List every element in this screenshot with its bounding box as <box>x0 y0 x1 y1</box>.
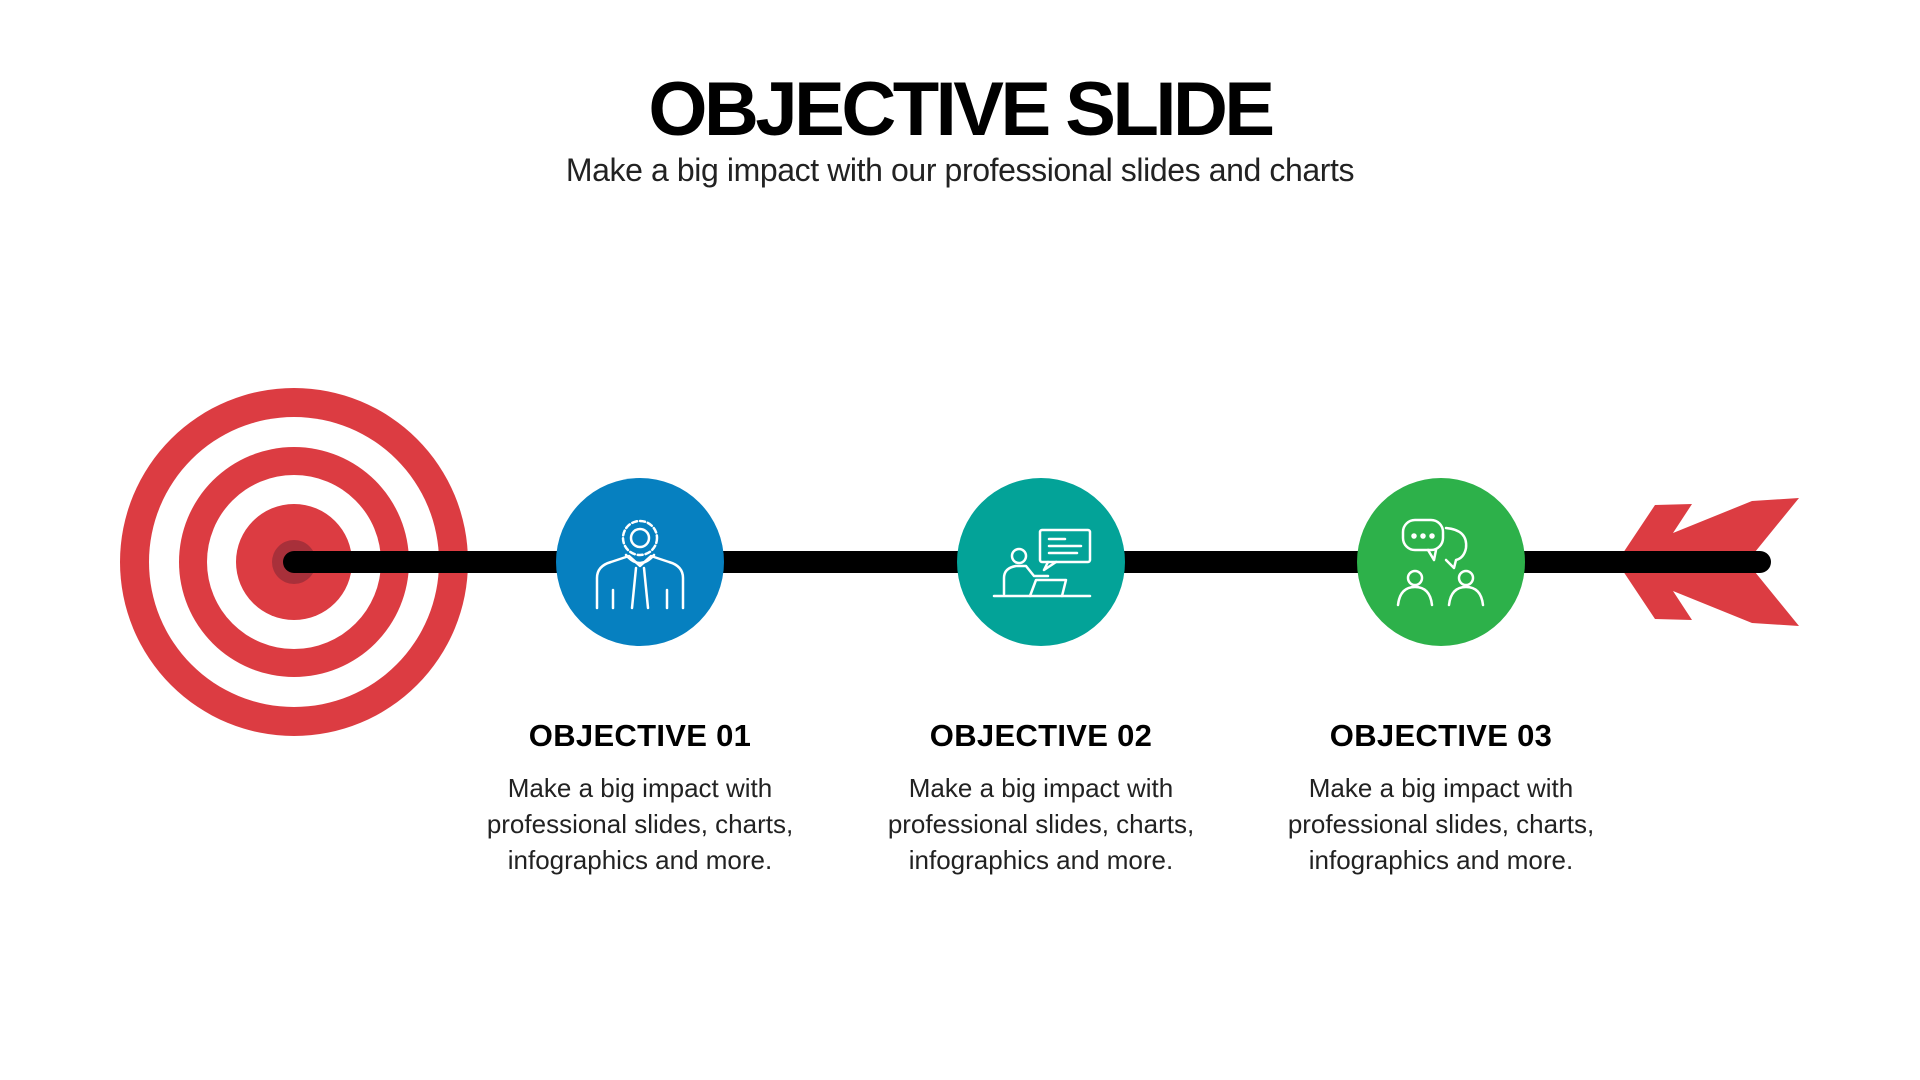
text block: objective 02 <box>888 718 1194 875</box>
arrow shaft <box>294 551 1760 573</box>
text block: objective 03: infographics and more. <box>1309 845 1573 875</box>
arrow fletching <box>1617 498 1799 626</box>
icon: chat people <box>1357 478 1525 646</box>
text block: objective 01 <box>487 718 793 875</box>
text block: objective 03 <box>1288 718 1594 875</box>
icon: target <box>120 388 468 736</box>
icon: person with gear <box>556 478 724 646</box>
subtitle: Make a big impact with our professional slides and charts <box>566 152 1354 188</box>
text block: objective 02: OBJECTIVE 02 <box>930 718 1152 753</box>
text block: objective 03: Make a big impact with <box>1309 773 1573 803</box>
text block: objective 03: OBJECTIVE 03 <box>1330 718 1552 753</box>
text block: objective 02: infographics and more. <box>909 845 1173 875</box>
text block: objective 01: professional slides, charts, <box>487 809 793 839</box>
text block: objective 01: OBJECTIVE 01 <box>529 718 751 753</box>
text block: objective 01: infographics and more. <box>508 845 772 875</box>
title: OBJECTIVE SLIDE <box>648 67 1272 152</box>
icon: person at laptop with chat <box>957 478 1125 646</box>
text block: objective 03: professional slides, charts, <box>1288 809 1594 839</box>
text block: objective 02: Make a big impact with <box>909 773 1173 803</box>
text block: objective 02: professional slides, charts, <box>888 809 1194 839</box>
text block: objective 01: Make a big impact with <box>508 773 772 803</box>
